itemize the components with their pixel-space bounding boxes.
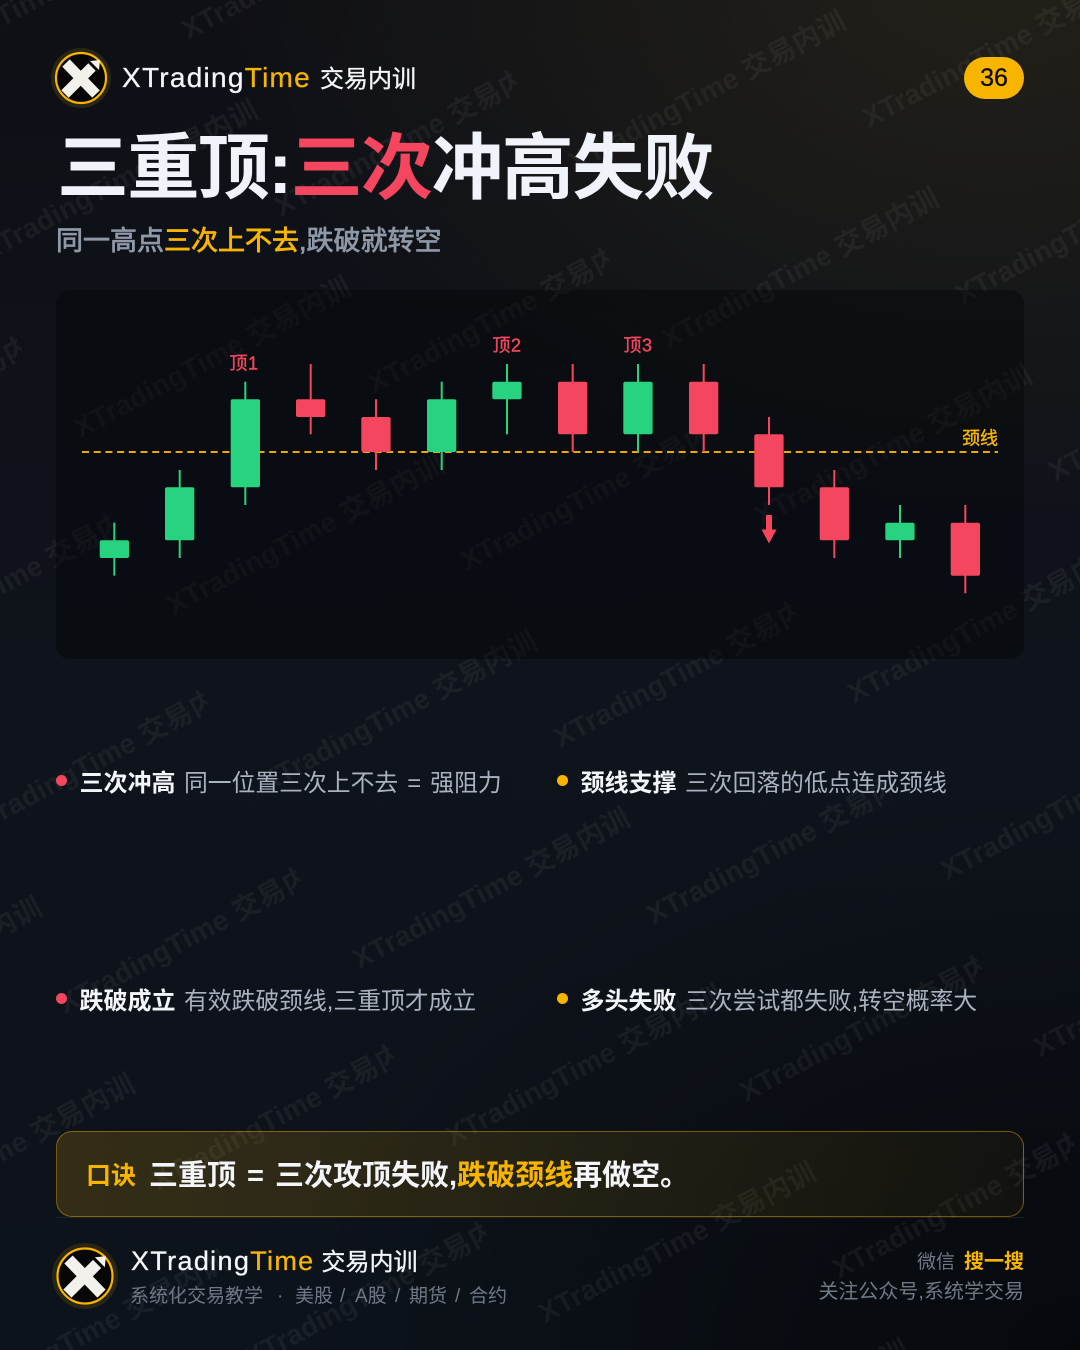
candle 8 [558, 364, 587, 452]
footer tagline: 合约 [469, 1286, 507, 1307]
candle 7 [492, 364, 522, 434]
candle 1 [100, 523, 129, 576]
subtitle: 同一高点三次上不去,跌破就转空 [56, 226, 442, 256]
footer logo [52, 1243, 118, 1309]
callout: mnemonic [56, 1131, 1024, 1217]
candle 5 [361, 399, 391, 470]
background watermark: XTradingTime 交易内训 [347, 802, 635, 975]
candle 3 [231, 382, 260, 505]
candle 13 [885, 505, 915, 558]
footer tagline: A股 [355, 1286, 387, 1307]
arrow: breakdown [762, 515, 776, 544]
bullet 2: 颈线支撑 三次回落的低点连成颈线 [580, 770, 947, 797]
background watermark: XTradingTime 交易内训 [749, 359, 1037, 532]
footer tagline: / [395, 1286, 400, 1307]
panel: candlestick chart [56, 290, 1024, 659]
candle 12 [820, 470, 849, 558]
background watermark: XTradingTime 交易内训 [548, 581, 836, 753]
issue number badge: 36 [980, 64, 1008, 92]
candle 9 [623, 364, 653, 452]
background watermark: XTradingTime 交易内训 [362, 227, 650, 399]
footer divider [56, 1217, 1024, 1218]
header logo [51, 48, 111, 108]
candle 6 [427, 382, 456, 470]
candle 10 [689, 364, 718, 452]
background watermark: XTradingTime 交易内训 [563, 5, 851, 178]
candle 2 [165, 470, 194, 558]
background watermark: XTradingTime 交易内训 [269, 50, 557, 222]
background watermark: XTradingTime 交易内训 [53, 847, 341, 1019]
bullet 4: 多头失败 三次尝试都失败,转空概率大 [580, 988, 977, 1015]
footer tagline [130, 1286, 507, 1307]
footer tagline: / [455, 1286, 460, 1307]
background watermark: XTradingTime 交易内训 [641, 758, 929, 930]
footer tagline: 期货 [409, 1286, 447, 1307]
background watermark: XTradingTime 交易内训 [68, 271, 356, 444]
footer tagline: 美股 [295, 1286, 333, 1307]
label: top 3: 顶3 [623, 336, 653, 356]
background watermark: XTradingTime 交易内训 [161, 448, 449, 621]
label: neckline: 颈线 [962, 428, 998, 448]
title: 三重顶:三次冲高失败 [57, 129, 713, 209]
footer tagline: / [340, 1286, 345, 1307]
background watermark: XTradingTime 交易内训 [455, 404, 743, 576]
candlestick chart [82, 336, 998, 594]
label: top 2: 顶2 [492, 336, 522, 356]
background watermark: XTradingTime 交易内训 [656, 182, 944, 355]
label: top 1: 顶1 [229, 354, 259, 374]
footer tagline: 系统化交易教学 [130, 1286, 263, 1307]
candle 11 [754, 417, 784, 505]
neckline [82, 451, 998, 453]
header brand name: XTradingTime 交易内训 [122, 62, 416, 93]
footer follow note: 关注公众号,系统学交易 [818, 1281, 1024, 1303]
footer wechat search: 微信 搜一搜 [917, 1251, 1024, 1273]
background watermark: XTradingTime 交易内训 [146, 1024, 434, 1196]
candle 4 [296, 364, 325, 434]
candle 14 [951, 505, 980, 593]
background watermark: XTradingTime 交易内训 [533, 1156, 821, 1329]
background watermark: XTradingTime 交易内训 [254, 625, 542, 798]
bullet 1: 三次冲高 同一位置三次上不去 = 强阻力 [80, 770, 502, 797]
background watermark: XTradingTime 交易内训 [440, 979, 728, 1152]
footer brand name: XTradingTime 交易内训 [131, 1246, 418, 1276]
callout label: 口诀 [86, 1162, 136, 1190]
bullet 3: 跌破成立 有效跌破颈线,三重顶才成立 [80, 988, 476, 1015]
background watermark: XTradingTime 交易内训 [734, 935, 1022, 1107]
callout text: 三重顶 = 三次攻顶失败,跌破颈线再做空。 [149, 1160, 689, 1192]
issue number badge [964, 57, 1024, 99]
footer tagline: · [277, 1286, 283, 1307]
